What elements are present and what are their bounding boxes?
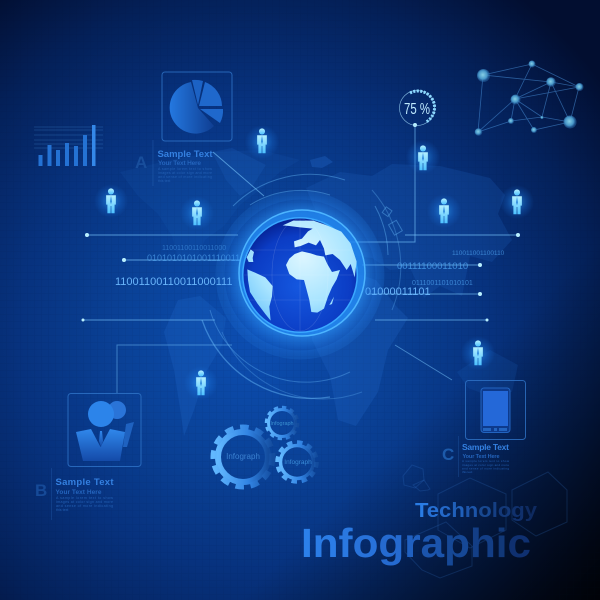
icon: pie chart: [162, 72, 232, 141]
sample text A: and sense of more indicating: [158, 175, 212, 179]
binary number streams: 110011001100110: [452, 250, 505, 257]
binary number streams: 11001100110011000111: [115, 276, 232, 288]
sample text B: and sense of more indicating: [56, 504, 113, 508]
right gear: Infograph: [284, 459, 312, 466]
connector lines: [82, 123, 520, 393]
network diagram: [475, 60, 584, 136]
75 percent gauge: [400, 90, 435, 126]
binary number streams: 01000011101: [365, 286, 431, 298]
panel A: pie chart card: [135, 72, 232, 186]
bar chart: [34, 125, 103, 166]
hexagon outlines: [403, 465, 567, 578]
sample text A: [153, 140, 213, 186]
sample text A: images at color sign and more: [158, 171, 212, 175]
binary number streams: 0101010101001110011: [147, 253, 240, 263]
gears: [214, 408, 316, 486]
icon: business people: [68, 394, 141, 466]
sample text C: Sample Text: [462, 442, 509, 452]
binary number streams: 00111100011010: [397, 261, 468, 272]
title: Technology: Technology: [415, 500, 538, 522]
binary number streams: [115, 245, 505, 298]
label C: C: [442, 445, 454, 464]
sample text A: this text: [158, 179, 170, 183]
sample text B: [52, 468, 114, 520]
sample text C: A sample lorem text to show: [462, 459, 510, 463]
person icons: [94, 125, 534, 400]
concentric tech rings around globe: [202, 174, 402, 399]
binary number streams: 0111001101010101: [412, 280, 473, 287]
sample text C: this text: [462, 470, 473, 474]
big gear: Infograph: [226, 452, 260, 461]
sample text C: and sense of more indicating: [462, 466, 509, 470]
panel B: business people card: [35, 394, 141, 520]
panel C: mobile device card: [442, 380, 526, 477]
small top gear: Infograph: [270, 421, 294, 427]
sample text B: images at color sign and more: [56, 500, 113, 504]
sample text B: Sample Text: [56, 477, 114, 488]
globe: [218, 190, 386, 358]
sample text C: [458, 436, 510, 477]
sample text C: Your Text Here: [462, 454, 500, 460]
icon: mobile phone: [466, 380, 526, 440]
sample text A: Your Text Here: [158, 160, 201, 167]
sample text B: Your Text Here: [56, 489, 102, 496]
label B: B: [35, 481, 47, 500]
world map silhouette: [120, 148, 518, 436]
sample text A: Sample Text: [158, 149, 213, 160]
sample text A: A sample lorem text to show: [158, 167, 212, 171]
sample text B: A sample lorem text to show: [56, 496, 113, 500]
75 percent gauge: 75 %: [404, 101, 430, 118]
binary number streams: 11001100110011000: [162, 245, 226, 252]
globe continents: [247, 221, 357, 321]
globe grid lines: [244, 219, 356, 331]
sample text B: this text: [56, 508, 68, 512]
title: Infographic: Infographic: [301, 520, 531, 566]
sample text C: images at color sign and more: [462, 463, 509, 467]
label A: A: [135, 153, 147, 172]
